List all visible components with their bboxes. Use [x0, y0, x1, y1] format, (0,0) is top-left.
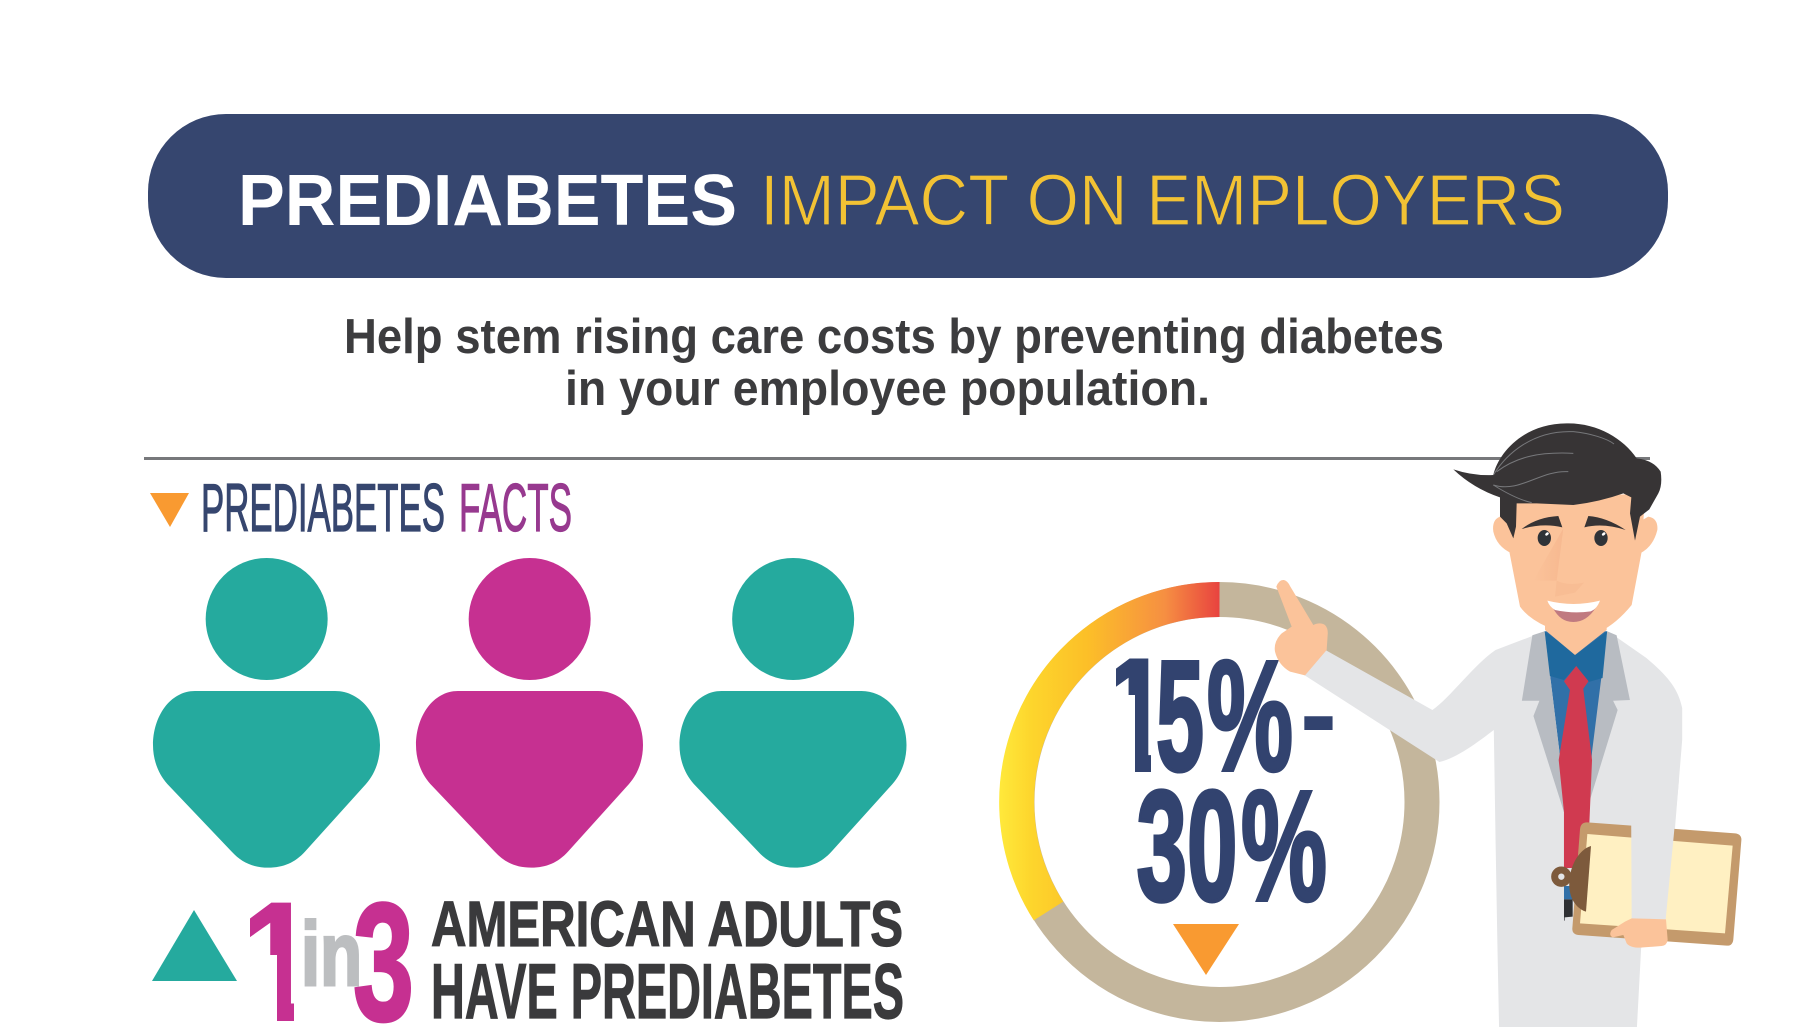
doctor right sleeve: [1631, 780, 1679, 919]
subtitle: in your employee population.: [565, 362, 1210, 416]
icon: person magenta center: [416, 558, 643, 868]
title banner: [148, 114, 1668, 278]
title text: impact on employers: IMPACT ON EMPLOYERS: [760, 161, 1565, 241]
heading text: PREDIABETES: [201, 470, 445, 546]
icon: orange triangle: [150, 493, 189, 527]
donut value text: 15%: 1: [1095, 623, 1175, 807]
subtitle: [344, 310, 1444, 416]
donut value text: 15%: -: [1300, 650, 1337, 778]
eyebrows: [1522, 516, 1562, 529]
doctor shirt: [1545, 631, 1607, 812]
doctor head: [1453, 423, 1661, 655]
doctor collar: [1545, 631, 1607, 682]
doctor coat and arm: [1303, 631, 1682, 1027]
clipboard clip: [1555, 870, 1568, 883]
donut chart: 15% to 30%: [1017, 599, 1422, 1004]
donut value text: 30%: %: [1241, 759, 1327, 934]
icon: person teal left: [153, 558, 380, 868]
mouth: [1553, 607, 1596, 622]
donut value text: 15%: %: [1207, 629, 1293, 804]
doctor tie: [1559, 666, 1592, 868]
title text: prediabetes: PREDIABETES: [238, 161, 737, 241]
section heading: prediabetes facts: FACTS: [459, 470, 572, 546]
stat: 1 in 3 american adults: [152, 900, 902, 1024]
subtitle: Help stem rising care costs by preventing diabetes: [344, 310, 1444, 364]
doctor lapels: [1522, 631, 1564, 812]
hair: [1453, 423, 1661, 541]
donut value text: 15%: [1116, 658, 1333, 774]
clipboard: [1555, 780, 1741, 948]
icon: teal up triangle: [152, 910, 237, 981]
doctor lower hand: [1610, 918, 1668, 948]
donut value text: 15%: 5: [1156, 629, 1204, 804]
donut value text: 30%: 30: [1136, 759, 1238, 934]
icon: person teal right: [679, 558, 906, 868]
hair streaks: [1493, 432, 1614, 503]
word in: in: [301, 905, 362, 1005]
illustration: doctor: [1275, 423, 1741, 1027]
ears: [1493, 517, 1517, 553]
doctor pointing hand: [1275, 580, 1328, 675]
stat text: AMERICAN ADULTS: [431, 888, 903, 960]
face: [1508, 493, 1645, 641]
section heading: prediabetes facts: [150, 470, 572, 546]
eyes: [1538, 530, 1551, 546]
neck: [1545, 610, 1607, 655]
icon: orange down triangle: [1173, 924, 1239, 975]
